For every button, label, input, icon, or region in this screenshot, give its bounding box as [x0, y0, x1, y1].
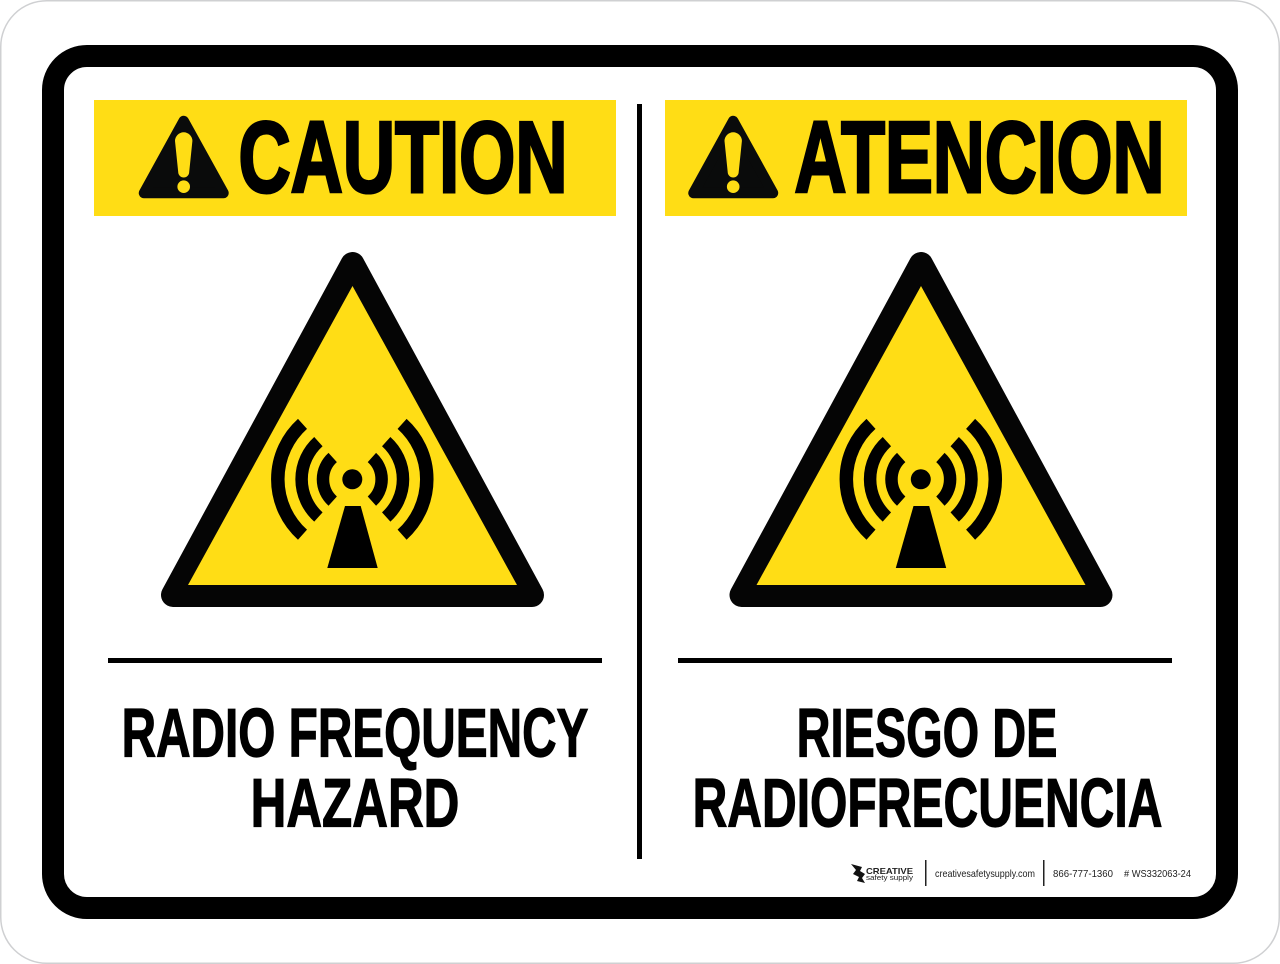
text: hazard description: [693, 694, 1162, 841]
panel: Spanish: [665, 100, 1187, 841]
atencion banner: [665, 100, 1187, 216]
product code: # WS332063-24: [1124, 868, 1191, 880]
supplier name: CREATIVE: [866, 866, 913, 876]
heading: CAUTION: CAUTION: [238, 102, 568, 214]
rule: [678, 658, 1172, 663]
icon: radio frequency hazard triangle: [742, 264, 1100, 595]
text: hazard description: [122, 694, 588, 841]
panel: English: [94, 100, 616, 841]
icon: supplier logo: [851, 864, 865, 883]
icon: small warning triangle: [694, 121, 773, 193]
text: hazard description: RIESGO DE: [797, 694, 1057, 771]
footer: supplier details: [851, 860, 1191, 886]
supplier name: safety supply: [866, 875, 914, 882]
icon: small warning triangle: [144, 121, 224, 193]
phone number: 866-777-1360: [1053, 868, 1113, 880]
text: hazard description: RADIO FREQUENCY: [122, 694, 588, 771]
rule: [108, 658, 602, 663]
supplier name: [866, 866, 914, 882]
caution banner: [94, 100, 616, 216]
text: hazard description: HAZARD: [251, 764, 459, 841]
icon: radio frequency hazard triangle: [173, 264, 532, 595]
website: creativesafetysupply.com: [935, 868, 1035, 880]
center divider: [637, 104, 642, 859]
